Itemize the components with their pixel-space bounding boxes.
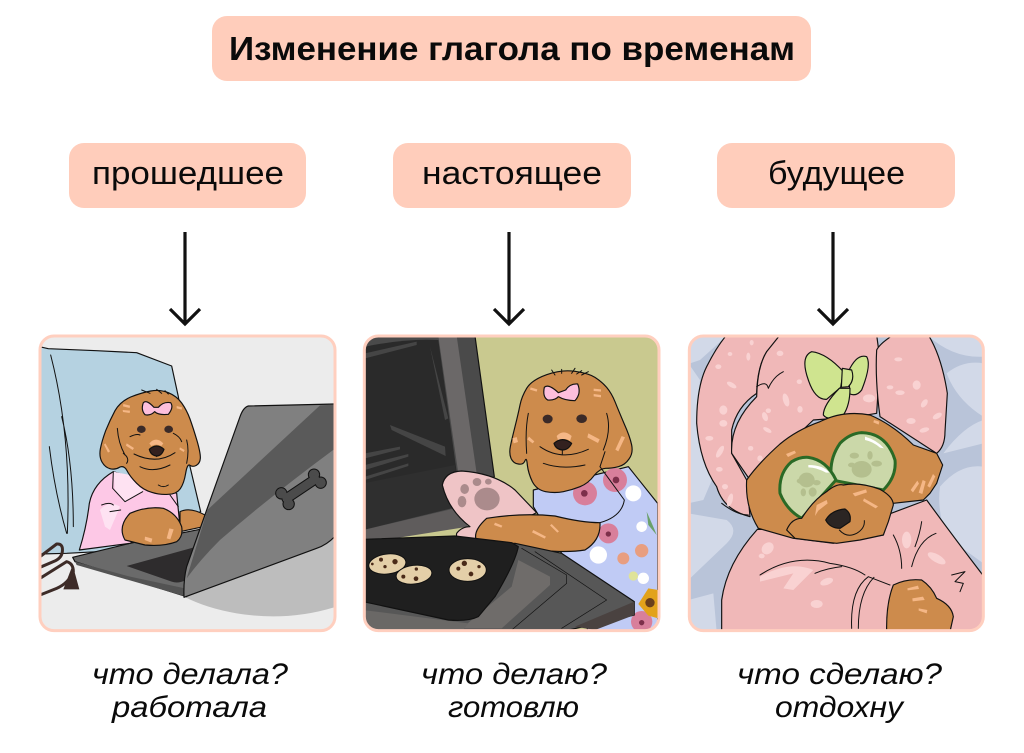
heading: future tense: будущее — [768, 155, 905, 191]
paw prints — [458, 478, 500, 510]
sleeve cuff edge — [722, 503, 748, 515]
robe highlights — [705, 340, 947, 608]
heading: past tense: прошедшее — [92, 155, 284, 191]
dress sleeve line — [600, 467, 624, 523]
flowers — [573, 468, 652, 632]
hood left — [697, 335, 780, 517]
hood right — [876, 335, 947, 453]
far paw — [180, 510, 205, 532]
arrow: present — [494, 232, 524, 324]
pillow highlights — [688, 336, 983, 632]
caption: past: работала — [111, 691, 267, 724]
eyes and nose — [543, 415, 553, 423]
laptop lid — [184, 404, 335, 597]
bow — [805, 352, 868, 418]
bow — [142, 402, 172, 415]
dog head — [510, 371, 632, 492]
dog head — [746, 413, 943, 543]
caption: present: готовлю — [448, 691, 579, 724]
title: Изменение глагола по временам — [229, 30, 795, 67]
oven door — [363, 336, 494, 533]
dog head — [100, 390, 200, 494]
oven open door — [363, 543, 634, 632]
baking tray — [363, 536, 518, 620]
robe body — [722, 500, 984, 632]
caption: future — [737, 658, 942, 724]
muzzle — [787, 484, 893, 543]
bone icon — [276, 469, 326, 510]
caption: present — [421, 658, 607, 724]
nose and smile — [826, 509, 850, 528]
heading: present tense: настоящее — [422, 155, 602, 191]
arrow: past — [170, 232, 200, 324]
shirt — [79, 472, 179, 550]
dog eyes and nose — [137, 426, 146, 433]
fur highlights — [786, 420, 935, 516]
heading: future tense — [717, 143, 955, 208]
cookies — [368, 552, 486, 586]
shadow — [184, 537, 334, 616]
panel: dog baking cookies — [363, 336, 660, 632]
dog highlights — [104, 404, 185, 453]
caption: past — [92, 658, 288, 724]
caption: present: что делаю? — [421, 658, 607, 691]
bow — [544, 384, 579, 401]
trackpad — [127, 547, 197, 583]
cucumber right — [831, 433, 895, 490]
heading: present tense — [393, 143, 631, 208]
caption: future: что сделаю? — [737, 658, 942, 691]
panel: dog working at laptop — [39, 336, 335, 631]
pillow — [39, 347, 201, 554]
laptop base — [73, 529, 200, 597]
heading: past tense — [69, 143, 306, 208]
caption: future: отдохну — [775, 691, 905, 724]
arm — [476, 515, 600, 551]
cucumber left — [780, 457, 836, 518]
dress — [533, 467, 658, 632]
oven mitt — [442, 471, 537, 543]
near paw — [122, 508, 182, 545]
panel: dog relaxing with cucumber slices — [688, 335, 985, 632]
title — [212, 16, 811, 81]
glasses — [40, 544, 73, 595]
caption: past: что делала? — [92, 658, 288, 691]
arrow: future — [818, 232, 848, 324]
paw — [887, 580, 953, 632]
